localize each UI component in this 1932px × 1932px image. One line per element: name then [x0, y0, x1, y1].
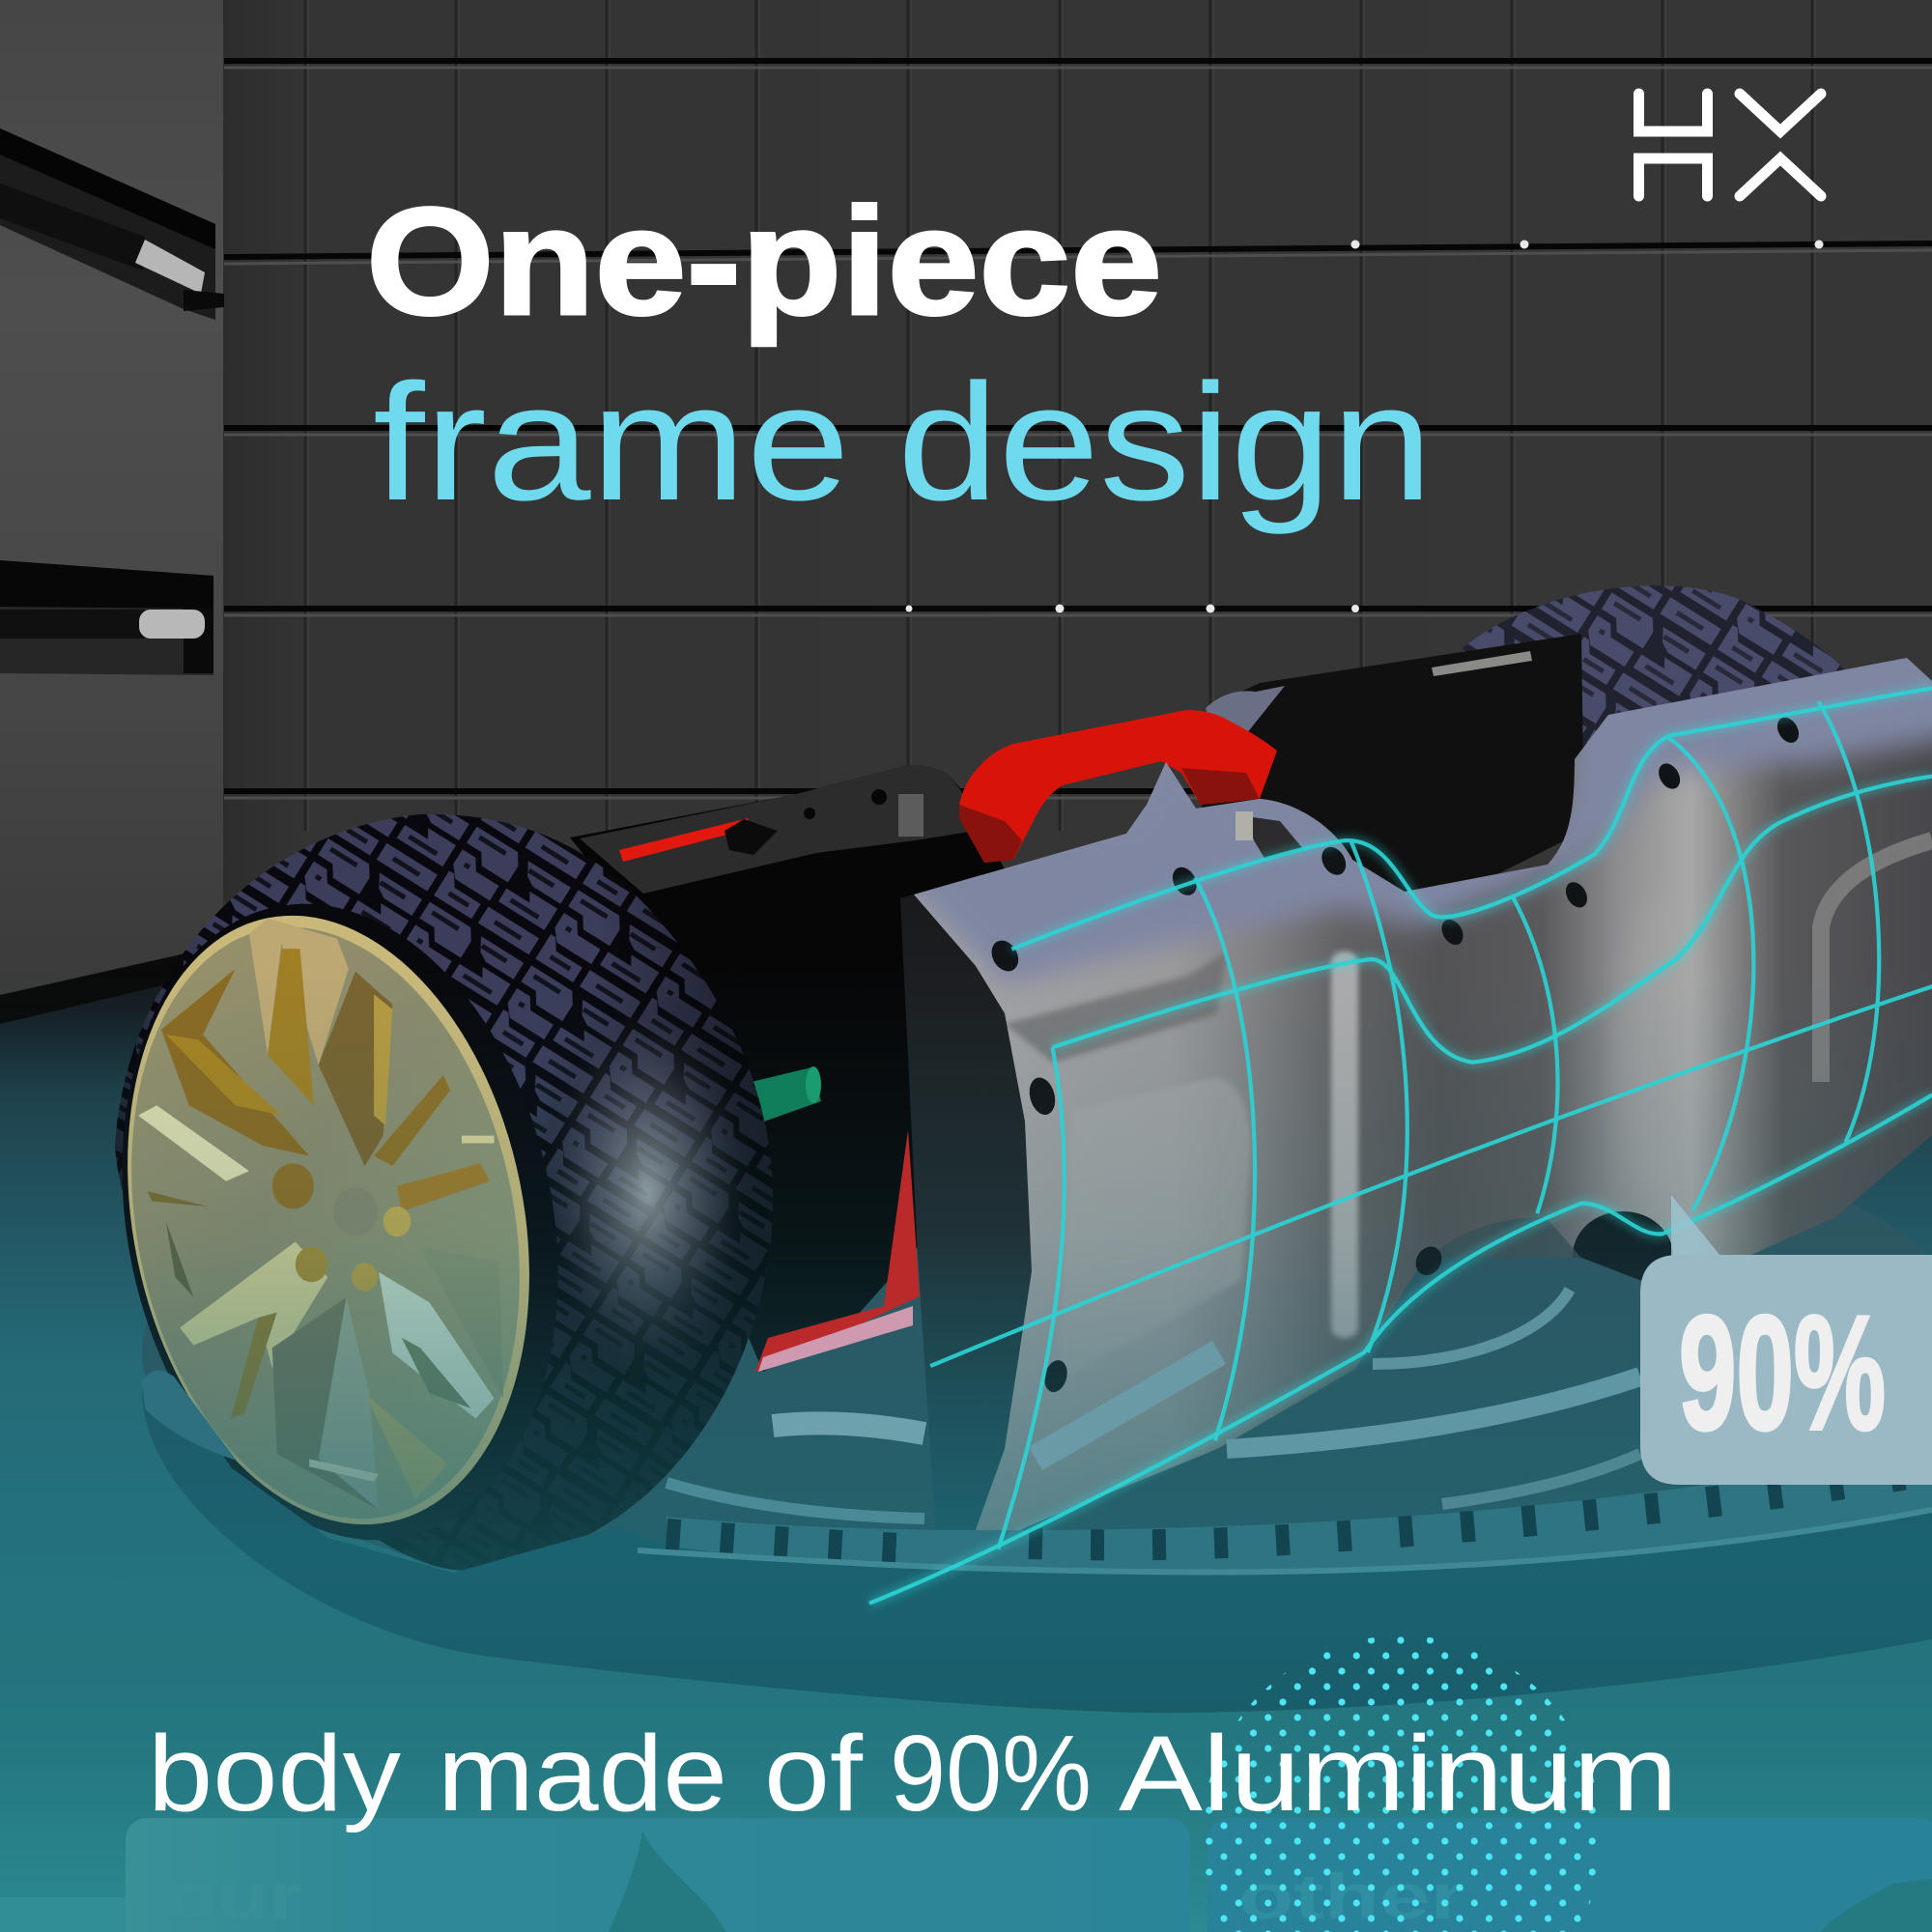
- turntable rim, rings and ticks: [142, 1290, 1932, 1713]
- subtitle: [148, 1714, 1678, 1833]
- faint figure left: [609, 1831, 726, 1932]
- subtitle: Aluminum: [1119, 1714, 1678, 1833]
- halftone dot circle: [1198, 1633, 1604, 1932]
- tan top sector: [249, 919, 349, 1065]
- faint label: our: our: [166, 1861, 301, 1932]
- platform side: [142, 1375, 1932, 1713]
- cyan wireframe lines: [869, 688, 1932, 1604]
- background: tiled wall: [0, 0, 1932, 1063]
- left wall panel with drawers: [0, 0, 224, 1032]
- turntable platform: [142, 1063, 1932, 1642]
- floor: [0, 952, 1932, 1932]
- valve stem: [752, 1066, 821, 1122]
- faint label: other: other: [1238, 1861, 1465, 1932]
- frame top lip: [914, 658, 1932, 991]
- frame front face: [900, 895, 1032, 1562]
- frame recesses and highlights: [1005, 811, 1932, 1381]
- body lower stripe: [1036, 1352, 1219, 1459]
- subtitle: of: [764, 1714, 863, 1833]
- red handle: [959, 710, 1277, 863]
- logo: HX: [1638, 94, 1821, 196]
- title line 2: frame: [373, 350, 850, 535]
- subtitle: made: [438, 1714, 727, 1833]
- faint figure right: [1821, 1879, 1932, 1932]
- light rings: [773, 1423, 924, 1434]
- rear wheel: [1449, 585, 1850, 773]
- rim highlight: [638, 1510, 1932, 1572]
- rear frame interior: [1198, 634, 1584, 927]
- lower red chassis: [755, 1130, 920, 1372]
- main frame body: [914, 658, 1932, 1559]
- callout: 90%: [1640, 1195, 1932, 1485]
- lower drawer groove: [0, 560, 213, 675]
- axle frame arm: [570, 765, 1005, 1372]
- tick marks: [667, 1534, 932, 1549]
- tick band: [667, 1444, 1932, 1571]
- hoverboard: [68, 585, 1932, 1579]
- subtitle: body: [148, 1714, 402, 1833]
- front tire: [115, 814, 773, 1571]
- frame bolt holes: [986, 714, 1803, 1395]
- golden wheel rim: [68, 865, 612, 1579]
- platform top face: [142, 1371, 237, 1461]
- upper drawer groove: [0, 128, 224, 320]
- teal gradient overlay: [0, 966, 1932, 1932]
- title line 1: One-piece: [366, 177, 1162, 347]
- subtitle: 90%: [890, 1714, 1092, 1833]
- lower glass panels with faint content: [0, 1818, 1932, 1932]
- title line 2: [373, 350, 1433, 535]
- title line 2: design: [897, 350, 1433, 535]
